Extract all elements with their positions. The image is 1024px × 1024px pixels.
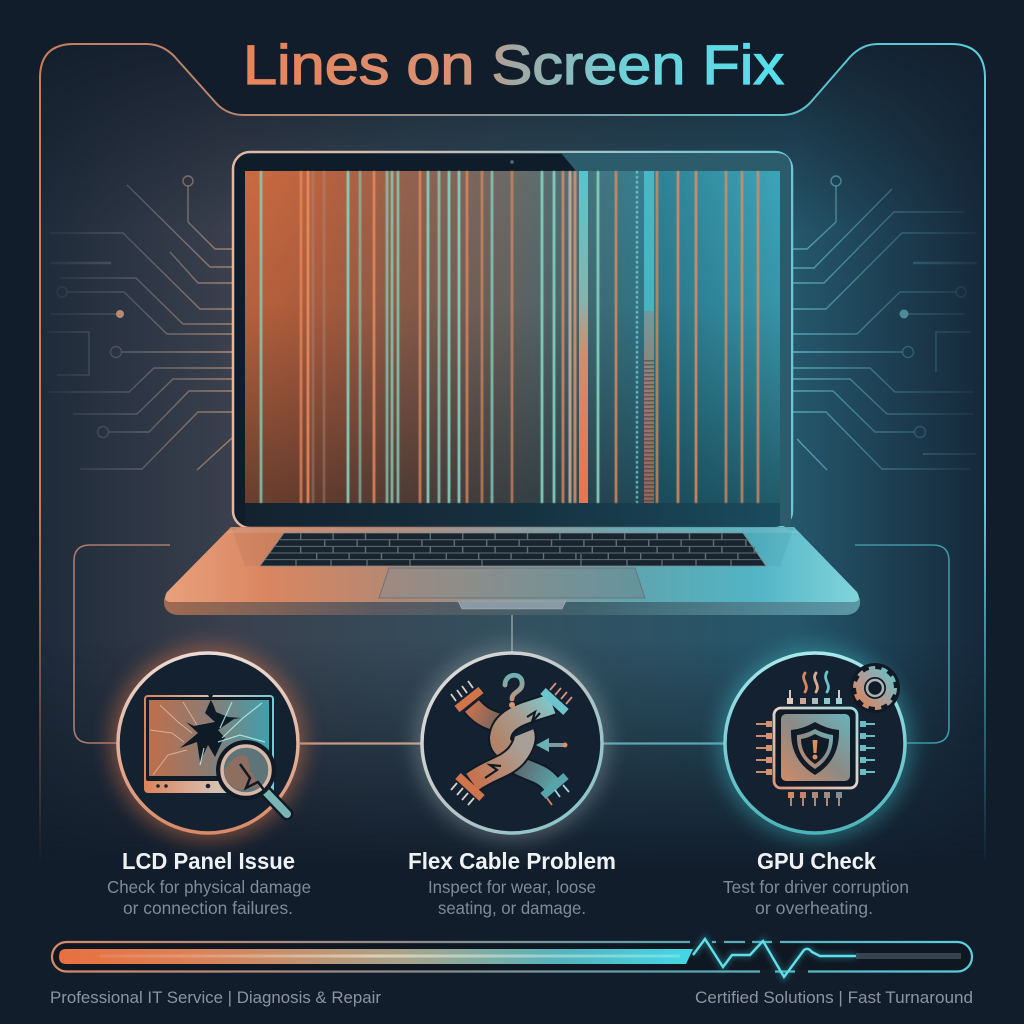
description: seating, or damage. [438,898,586,918]
description: Inspect for wear, loose [428,877,596,897]
description: or connection failures. [123,898,293,918]
heading: LCD Panel Issue [122,848,295,874]
card: flex cable problem [408,646,616,918]
circuit traces right [792,176,977,470]
connector lines [74,545,949,744]
progress bar with pulse [52,939,972,977]
laptop [164,152,860,615]
background [41,46,984,841]
card: LCD panel issue [107,646,311,918]
keyboard [260,533,766,566]
heading: Flex Cable Problem [408,848,616,874]
front notch [458,601,566,609]
circuit traces left [47,176,232,470]
icon: cracked monitor with magnifier [111,646,305,840]
title: Lines on Screen Fix [243,33,784,96]
screen with vertical lines [245,171,780,503]
footer right text: Certified Solutions | Fast Turnaround [695,988,973,1007]
trackpad [379,568,645,598]
header frame line [40,44,985,860]
description: or overheating. [755,898,873,918]
icon: GPU chip with shield and gear [718,646,912,840]
description: Test for driver corruption [723,877,909,897]
laptop lid [233,152,792,528]
footer left text: Professional IT Service | Diagnosis & Repair [50,988,381,1007]
icon: twisted flex cable [415,646,609,840]
description: Check for physical damage [107,877,311,897]
card: GPU check [718,646,912,918]
heading: GPU Check [757,848,876,874]
laptop base [164,527,860,615]
